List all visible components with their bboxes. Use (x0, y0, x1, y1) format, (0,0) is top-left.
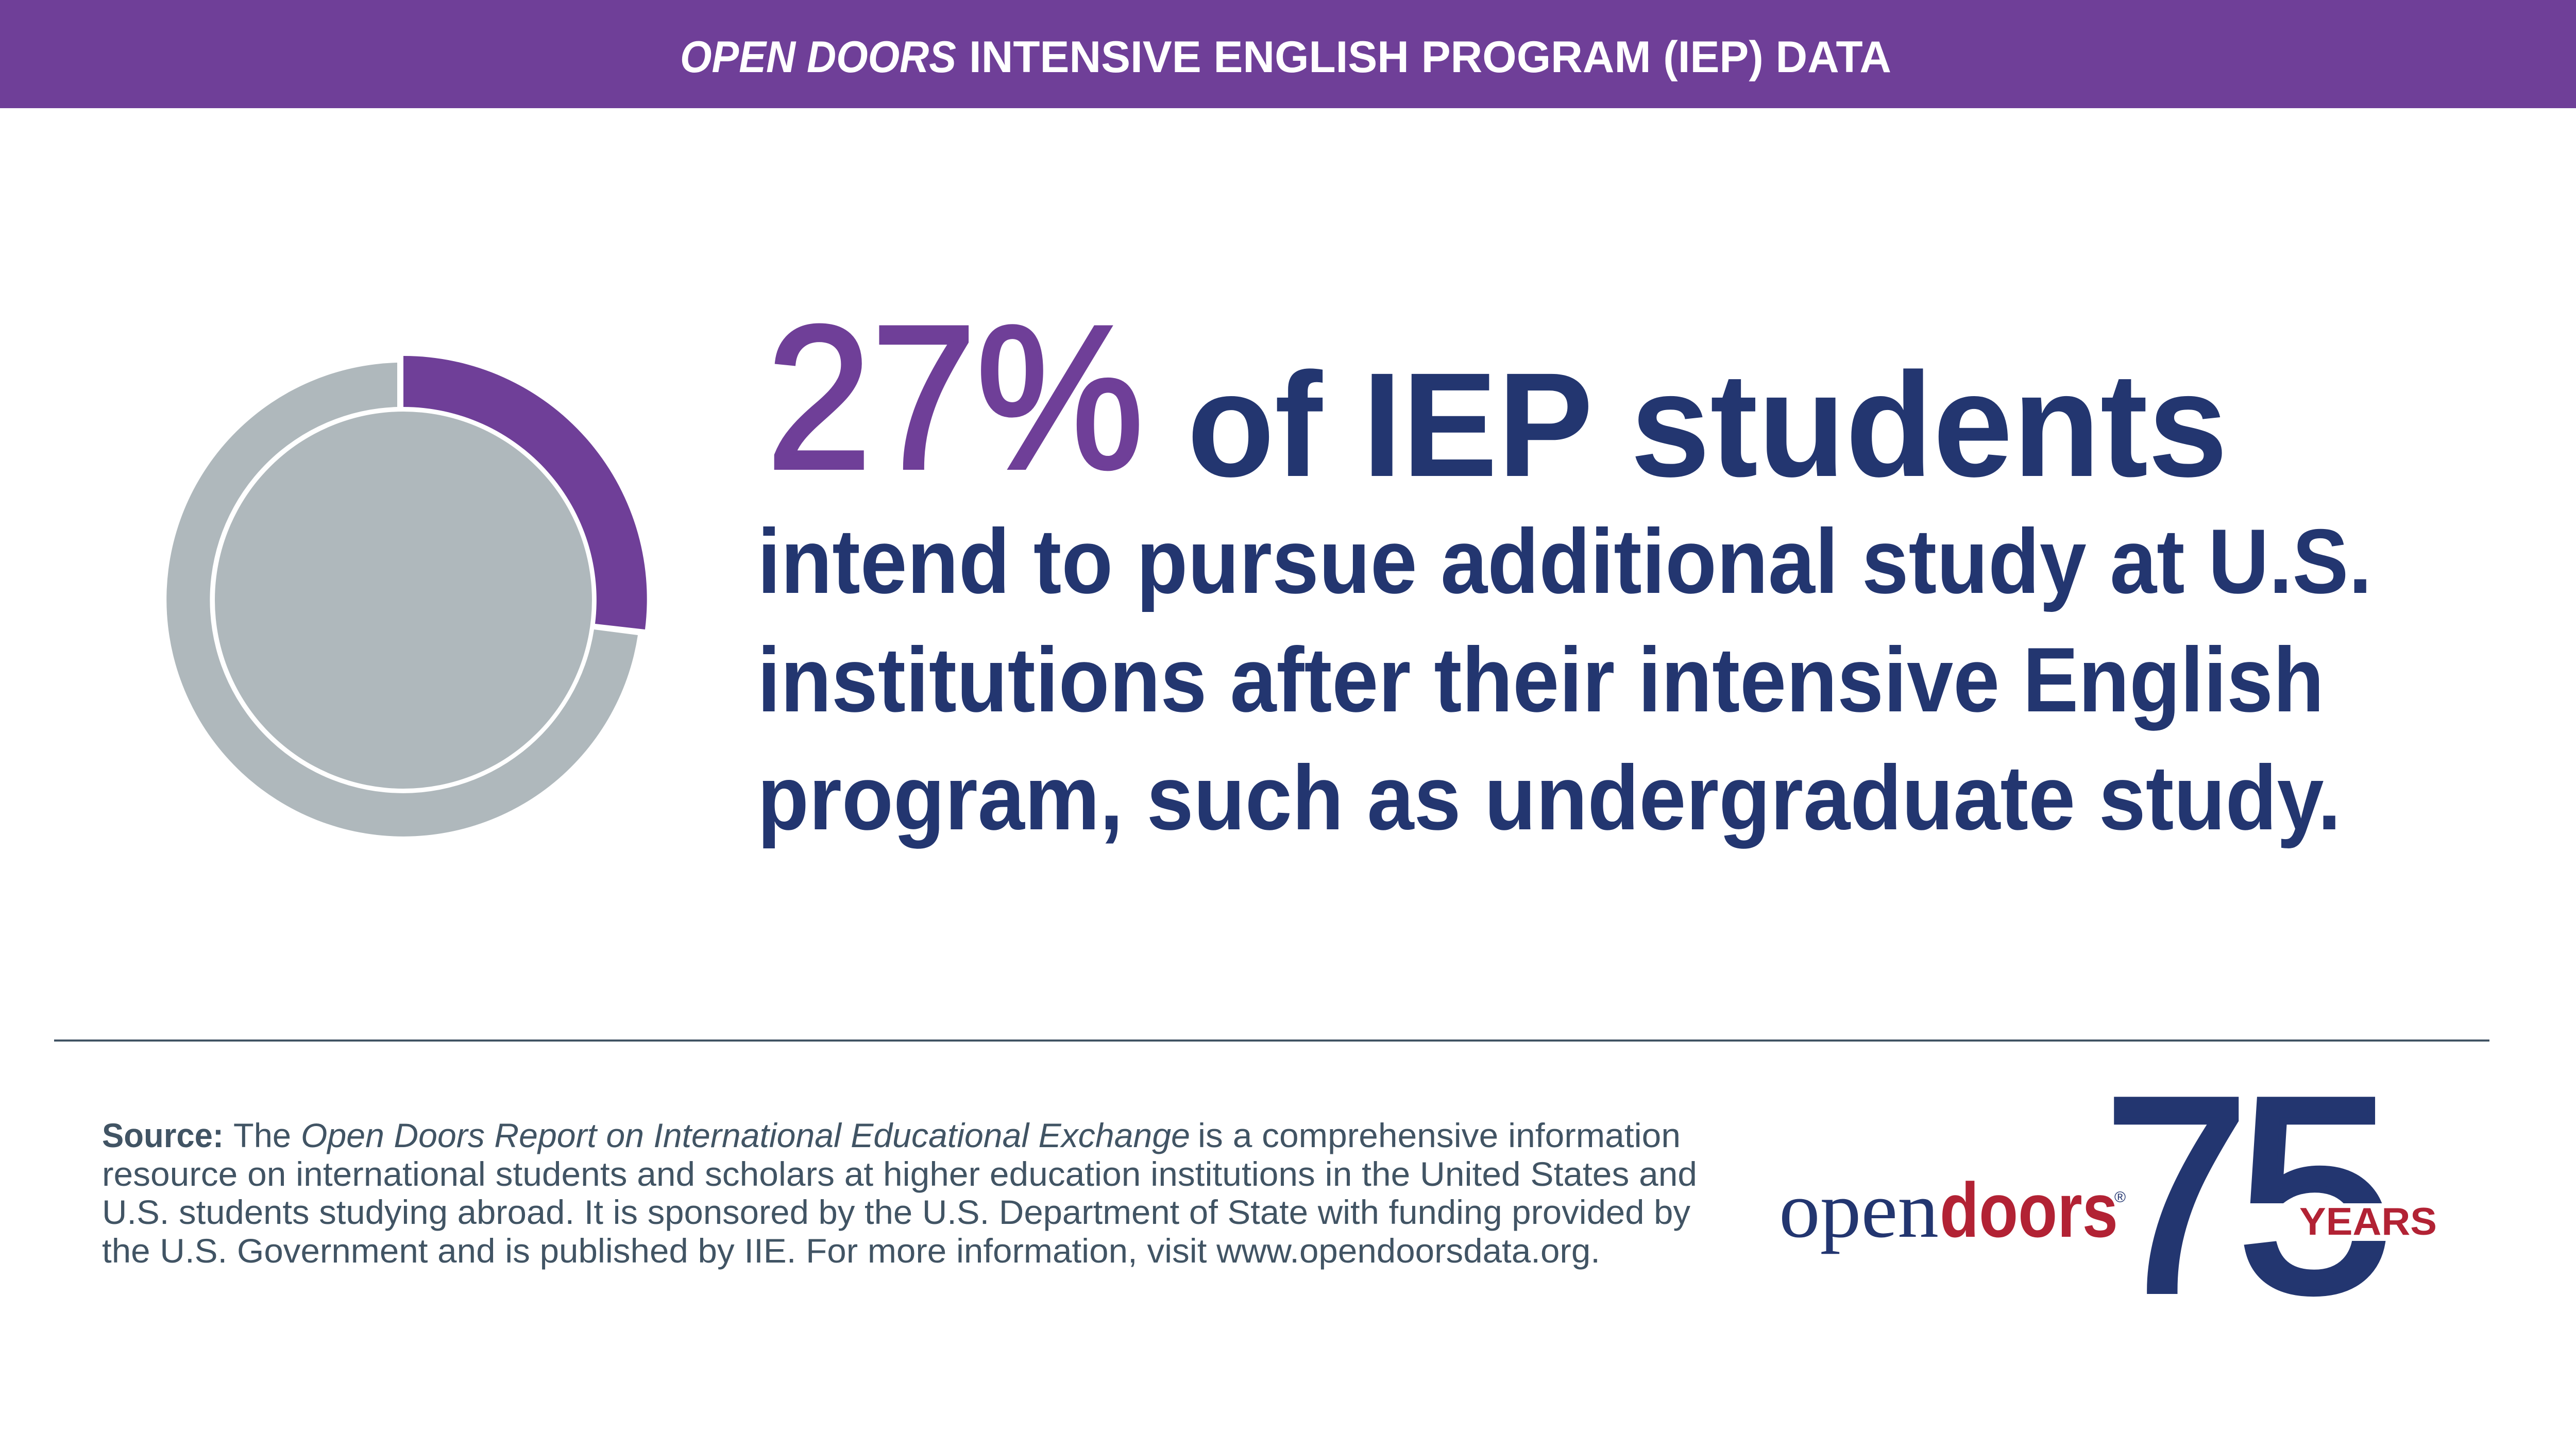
supporting statement (757, 510, 2372, 849)
of IEP students: of IEP students (1187, 342, 2228, 508)
source note: Open Doors Report on International Educational Exchange (301, 1116, 1190, 1154)
numeral 75: 5 (2237, 1041, 2395, 1349)
donut chart: 27 percent (166, 356, 647, 837)
source note: resource on international students and scholars at higher education institutions in the United States and (102, 1155, 1697, 1193)
source note: Source: (102, 1116, 224, 1154)
header banner (0, 0, 2576, 108)
wordmark (1779, 1165, 2126, 1254)
YEARS label: YEARS (2299, 1200, 2437, 1243)
wordmark: doors (1940, 1167, 2118, 1253)
27 percent figure: 27% (767, 283, 1144, 511)
supporting statement: intend to pursue additional study at U.S. (757, 510, 2372, 612)
supporting statement: institutions after their intensive English (757, 628, 2324, 731)
source note: the U.S. Government and is published by IIE. For more information, visit www.opendoorsdata.org. (102, 1232, 1600, 1270)
source note: The (233, 1116, 291, 1154)
Open Doors 75 Years logo (1779, 1041, 2437, 1349)
supporting statement: program, such as undergraduate study. (757, 746, 2341, 849)
inner circle (215, 412, 592, 789)
numeral 75: 7 (2104, 1041, 2248, 1349)
source note: is a comprehensive information (1198, 1116, 1681, 1154)
27 percent ring segment (403, 356, 647, 629)
source note (102, 1116, 1697, 1270)
headline statistic (767, 283, 2228, 511)
banner title: INTENSIVE ENGLISH PROGRAM (IEP) DATA (969, 32, 1891, 82)
numeral 75 (2104, 1041, 2395, 1349)
banner title: OPEN DOORS (680, 32, 956, 82)
wordmark: open (1779, 1165, 1939, 1254)
wordmark: ® (2114, 1189, 2126, 1206)
source note: U.S. students studying abroad. It is sponsored by the U.S. Department of State with funding provided by (102, 1193, 1690, 1231)
remaining 73 percent ring segment (166, 363, 638, 837)
